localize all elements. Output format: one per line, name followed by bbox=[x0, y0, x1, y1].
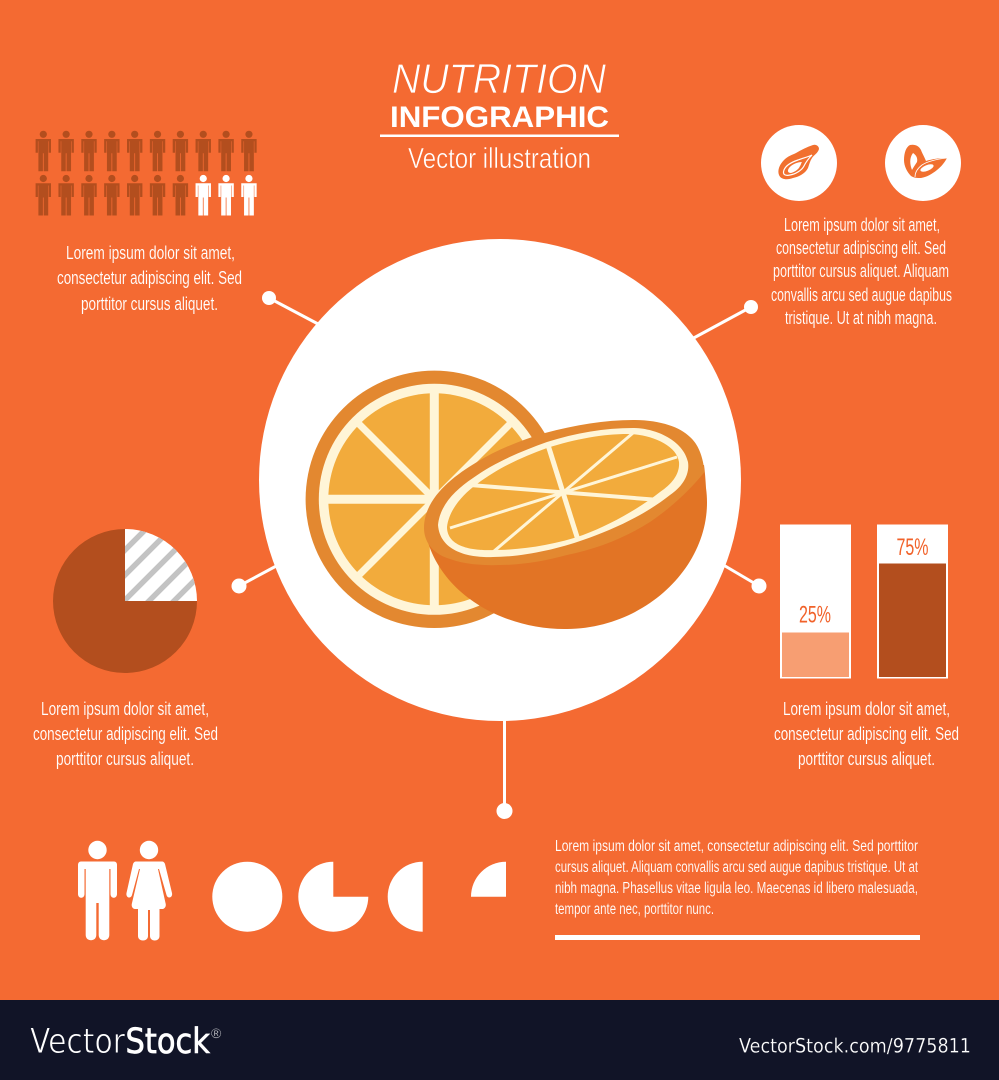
footer band: Vector bbox=[30, 1022, 126, 1062]
text block: top right: tristique. Ut at nibh magna. bbox=[785, 308, 937, 328]
text block: middle left: Lorem ipsum dolor sit amet, bbox=[41, 699, 209, 719]
connector: top right bbox=[690, 300, 758, 340]
divider rule under paragraph bbox=[555, 935, 920, 940]
connector: middle right bbox=[720, 563, 766, 594]
icon: papaya bbox=[761, 125, 837, 201]
title bbox=[380, 55, 619, 175]
text block: top left bbox=[57, 243, 242, 314]
title: NUTRITION bbox=[392, 55, 607, 102]
central white circle bbox=[259, 239, 741, 721]
bar: 25 percent: 25% bbox=[799, 602, 831, 628]
text block: middle right bbox=[774, 699, 959, 769]
pie chart: 75 percent dark, 25 percent hatched bbox=[53, 529, 197, 673]
text block: top left: consectetur adipiscing elit. Sed bbox=[57, 268, 242, 288]
text block: top left: porttitor cursus aliquet. bbox=[81, 294, 218, 314]
halved orange bbox=[424, 420, 707, 629]
text block: middle left: consectetur adipiscing elit. Sed bbox=[33, 724, 218, 744]
footer band: Stock bbox=[126, 1022, 211, 1062]
text block: middle left: porttitor cursus aliquet. bbox=[56, 749, 194, 769]
bar: 75 percent: 75% bbox=[896, 534, 928, 561]
people pictogram: 17 of 20 dark, 3 white bbox=[36, 131, 257, 216]
connector: bottom bbox=[496, 715, 512, 819]
text block: middle right: porttitor cursus aliquet. bbox=[798, 749, 935, 769]
connector: middle left bbox=[232, 564, 280, 594]
fraction shapes: full, three quarters, half, quarter bbox=[212, 862, 506, 932]
connector: top left bbox=[262, 291, 320, 325]
footer band: VectorStock.com/9775811 bbox=[739, 1034, 971, 1058]
title: INFOGRAPHIC bbox=[390, 101, 609, 134]
text block: top right bbox=[771, 215, 952, 328]
icon: woman bbox=[126, 841, 172, 940]
footer band bbox=[0, 1000, 999, 1080]
icon: man bbox=[78, 841, 117, 940]
text block: bottom paragraph: tempor ante nec, porttitor nunc. bbox=[555, 901, 714, 918]
title: Vector illustration bbox=[408, 143, 591, 175]
text block: middle left bbox=[33, 699, 218, 769]
whole orange slice bbox=[306, 371, 563, 628]
text block: bottom paragraph bbox=[555, 838, 918, 918]
text block: middle right: Lorem ipsum dolor sit amet, bbox=[783, 699, 950, 719]
bar: 75 percent bbox=[877, 524, 948, 678]
text block: top left: Lorem ipsum dolor sit amet, bbox=[66, 243, 235, 263]
bar: 25 percent bbox=[780, 524, 851, 678]
icon: almond seed bbox=[885, 125, 961, 201]
footer band: ® bbox=[211, 1025, 222, 1041]
